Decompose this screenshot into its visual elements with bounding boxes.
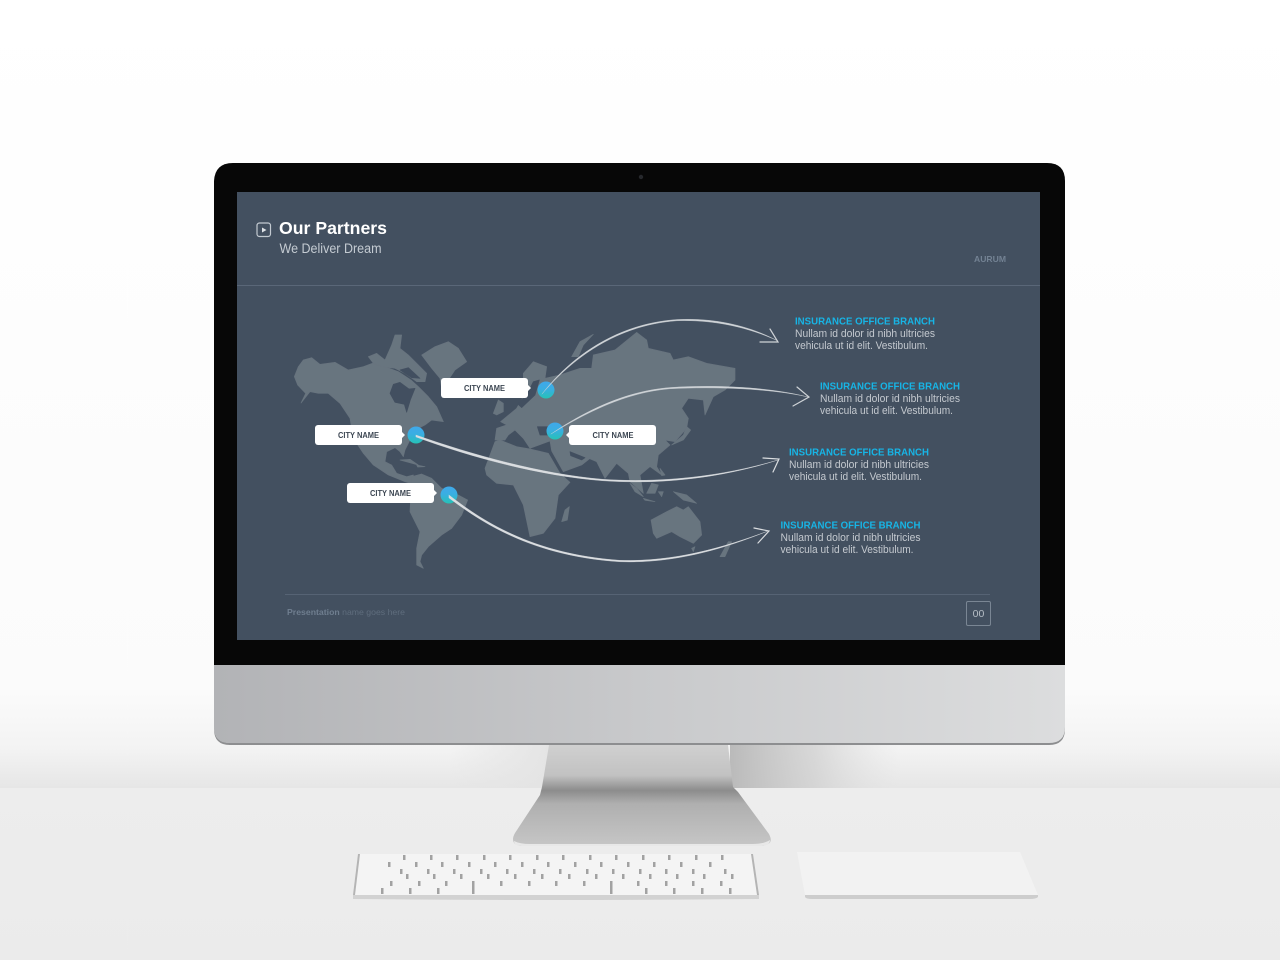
text block: branch 1: Nullam id dolor id nibh ultricies xyxy=(795,328,935,340)
arctic channel xyxy=(400,368,420,378)
americas xyxy=(294,335,468,568)
header xyxy=(257,218,1006,264)
city label: turkey: CITY NAME xyxy=(592,431,634,440)
greenland xyxy=(422,342,467,388)
cuba xyxy=(400,459,418,465)
marker: turkey xyxy=(546,422,564,440)
text block: branch 2: INSURANCE OFFICE BRANCH xyxy=(820,380,960,392)
monitor stand xyxy=(513,745,771,846)
stand shadow on wall xyxy=(450,745,900,788)
city label: north america xyxy=(315,425,405,445)
subtitle: We Deliver Dream xyxy=(280,241,382,256)
text block: branch 3: vehicula ut id elit. Vestibulum. xyxy=(789,471,922,483)
text block: branch 3 xyxy=(789,446,929,483)
webcam xyxy=(639,175,643,179)
page number box xyxy=(966,602,990,626)
desk surface xyxy=(0,788,1280,960)
new guinea xyxy=(673,492,697,503)
text block: branch 1: vehicula ut id elit. Vestibulum. xyxy=(795,340,928,352)
marker: northern europe xyxy=(538,382,554,398)
text block: branch 3: INSURANCE OFFICE BRANCH xyxy=(789,446,929,458)
text block: branch 3: Nullam id dolor id nibh ultricies xyxy=(789,459,929,471)
text block: branch 4: Nullam id dolor id nibh ultricies xyxy=(780,532,921,544)
arrow: north america to branch 3 xyxy=(416,435,779,482)
hispaniola xyxy=(417,465,425,467)
screen panel xyxy=(237,192,1040,640)
arrow: south america to branch 4 xyxy=(449,495,769,562)
japan xyxy=(672,427,691,445)
borneo xyxy=(647,483,658,493)
city label: turkey xyxy=(566,425,656,445)
arrow: europe to branch 1 xyxy=(542,319,778,394)
africa xyxy=(485,440,570,537)
australia xyxy=(651,507,702,543)
marker: south america xyxy=(440,486,458,504)
sumatra xyxy=(630,483,643,497)
trackpad xyxy=(797,852,1038,899)
text block: branch 4 xyxy=(780,520,921,556)
footer text: Presentation name goes here xyxy=(287,607,405,617)
hudson bay xyxy=(390,382,415,412)
location dots xyxy=(408,382,564,504)
monitor body xyxy=(214,163,1065,745)
text block: branch 4: INSURANCE OFFICE BRANCH xyxy=(780,520,920,532)
arctic islands xyxy=(368,335,427,382)
city label: north america: CITY NAME xyxy=(338,431,379,440)
arrow: turkey to branch 2 xyxy=(551,386,809,434)
tasmania xyxy=(692,547,695,552)
philippines xyxy=(660,468,665,476)
north america xyxy=(294,358,443,484)
title: Our Partners xyxy=(279,218,387,238)
text block: branch 2: Nullam id dolor id nibh ultricies xyxy=(820,393,960,405)
city label: south america: CITY NAME xyxy=(370,489,411,498)
text block: branch 2: vehicula ut id elit. Vestibulum. xyxy=(820,405,953,417)
city label: northern europe xyxy=(441,378,531,398)
city label: south america xyxy=(347,483,437,503)
black sea xyxy=(537,427,548,435)
text block: branch 1 xyxy=(795,316,935,352)
city label: northern europe: CITY NAME xyxy=(464,384,505,393)
madagascar xyxy=(562,507,569,522)
persian gulf xyxy=(570,452,585,460)
marker: north america xyxy=(408,426,424,444)
world map xyxy=(294,332,735,568)
eurasia xyxy=(495,332,735,493)
keyboard xyxy=(353,854,759,900)
brand label: AURUM xyxy=(974,254,1006,264)
eastern hemisphere xyxy=(485,332,735,557)
page number box: 00 xyxy=(973,608,984,620)
novaya zemlya xyxy=(572,334,593,357)
text block: branch 4: vehicula ut id elit. Vestibulum. xyxy=(780,544,914,556)
baltic sea xyxy=(517,380,539,408)
icon: play box xyxy=(257,223,270,236)
java xyxy=(643,498,655,502)
sulawesi xyxy=(658,492,663,497)
new zealand xyxy=(720,542,732,557)
british isles xyxy=(493,400,503,415)
text block: branch 1: INSURANCE OFFICE BRANCH xyxy=(795,316,935,328)
text block: branch 2 xyxy=(820,380,960,417)
south america xyxy=(410,474,468,568)
